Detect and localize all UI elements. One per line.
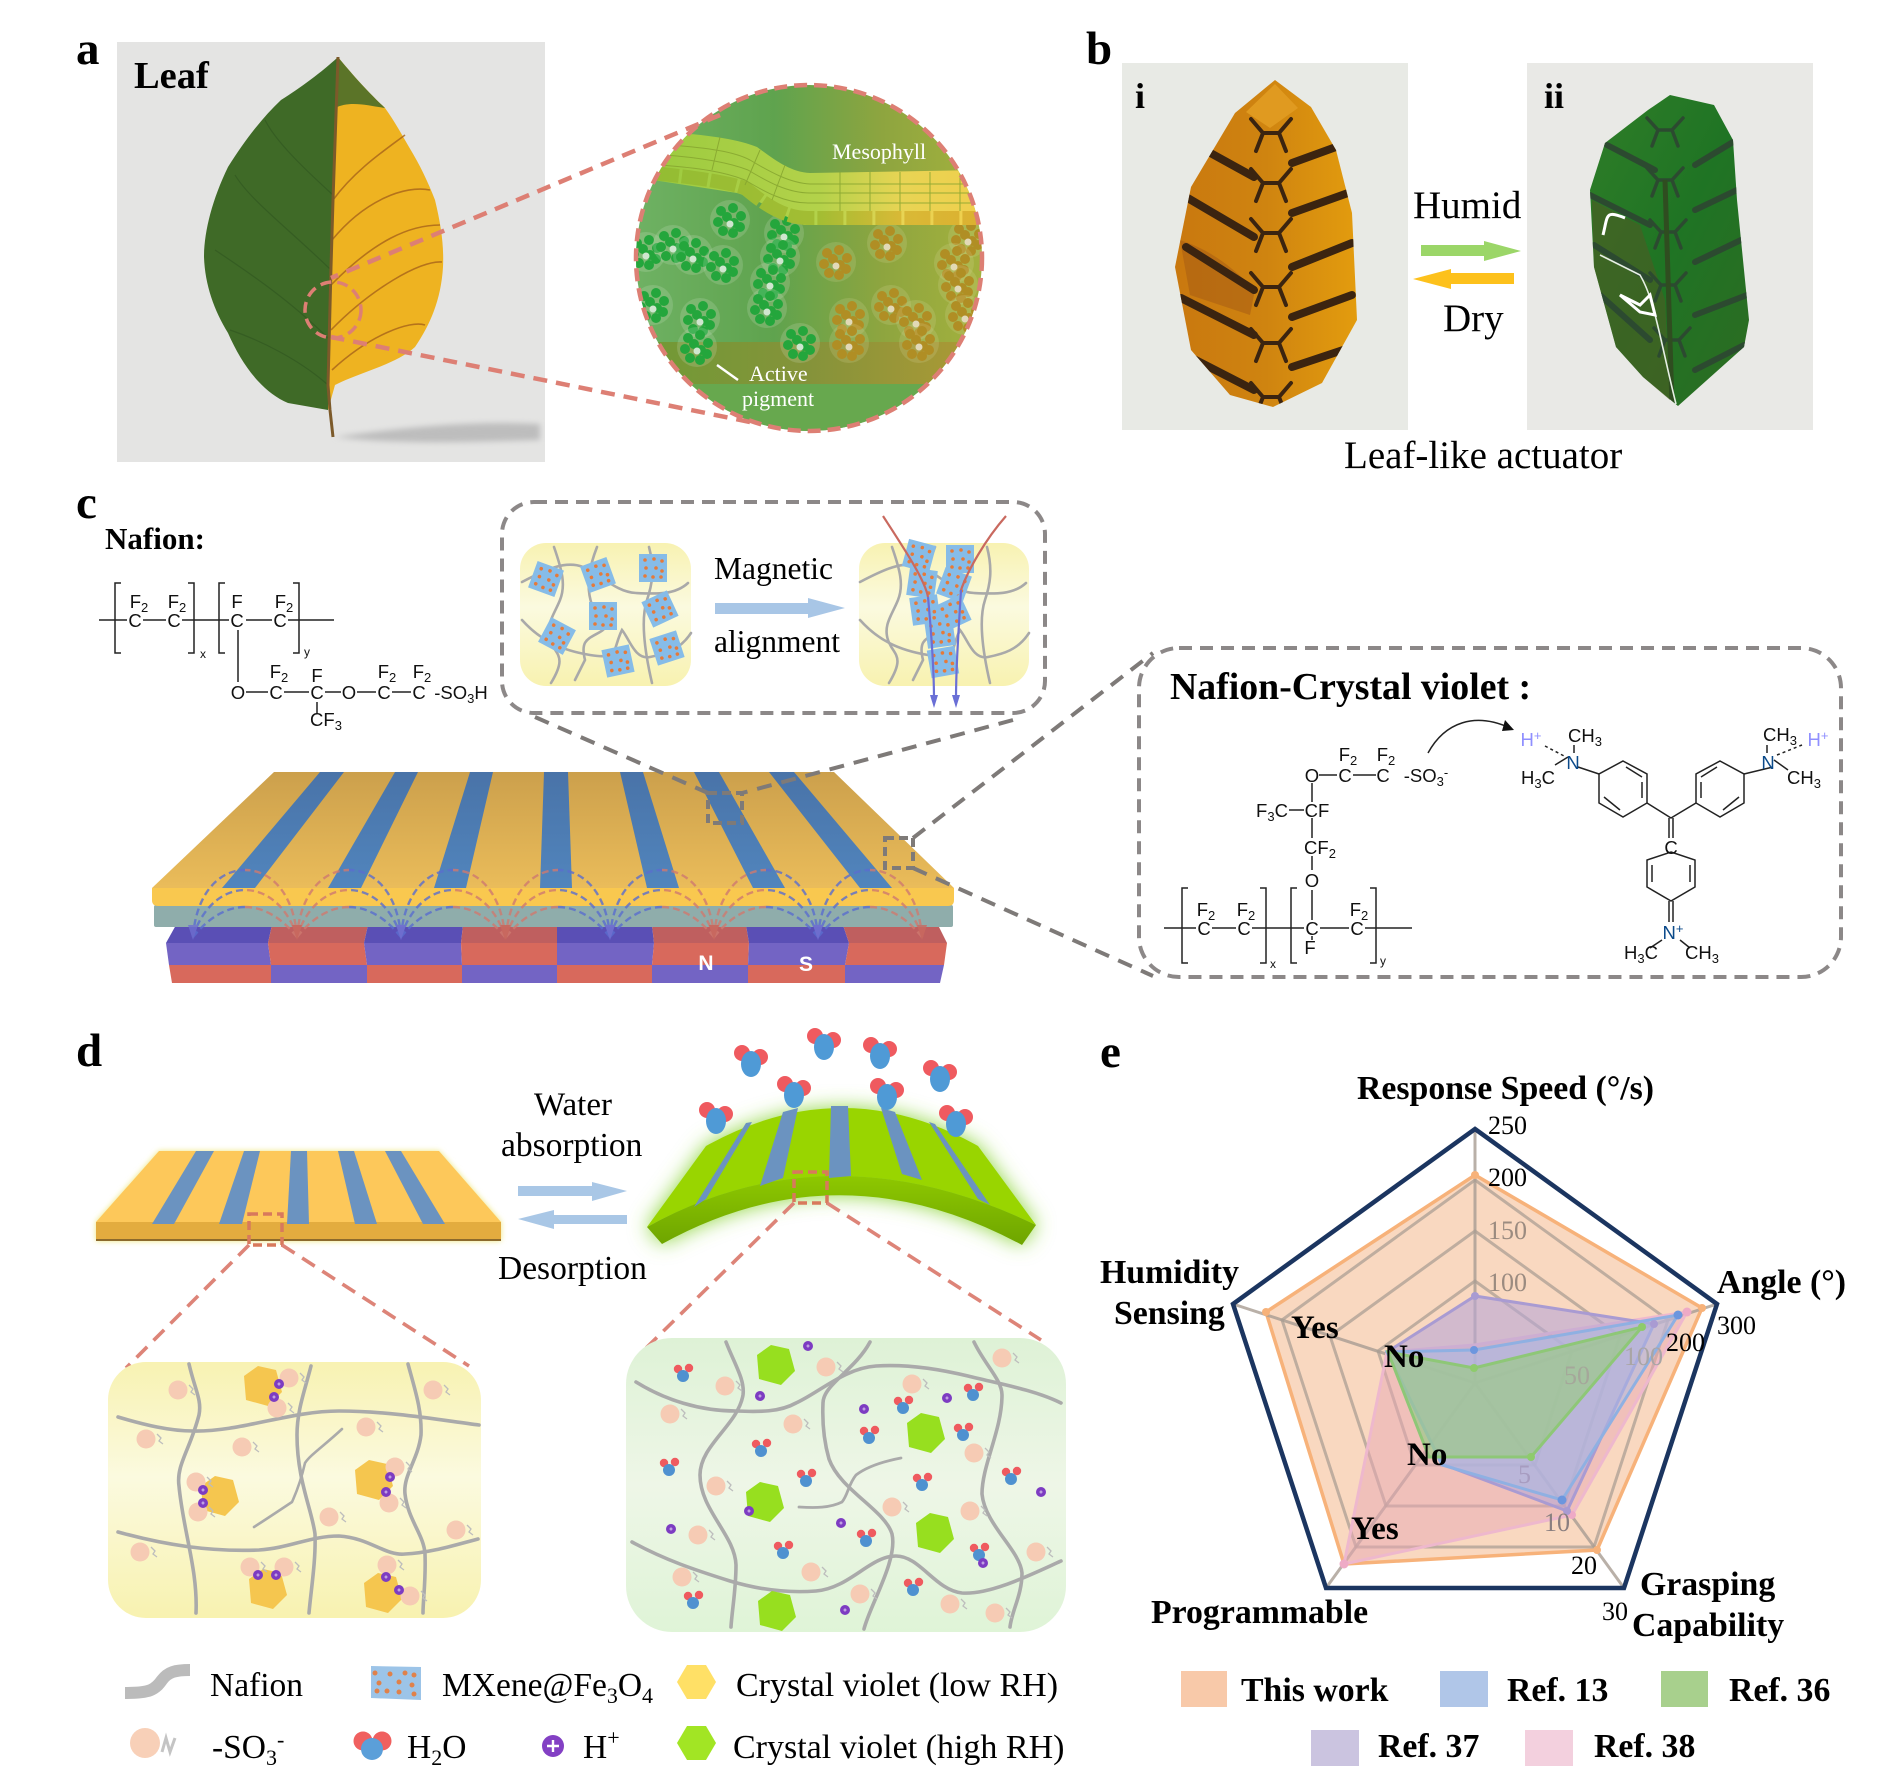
- chemical structure: crystal violet: N: [1761, 752, 1775, 773]
- chemical structure: Nafion side chain: F: [1197, 899, 1208, 920]
- legend: sulfonate group: -SO: [212, 1729, 266, 1766]
- legend: sulfonate group: [130, 1727, 284, 1770]
- arrow: humid (green): [1421, 241, 1521, 261]
- magnetic field lines: [883, 516, 1006, 700]
- label: Mesophyll: Mesophyll: [832, 139, 926, 164]
- arrow: desorption: [518, 1210, 627, 1229]
- series: Ref. 13: [1387, 1315, 1678, 1500]
- panel label a: a: [76, 23, 100, 75]
- axis tick numbers: [1488, 1111, 1756, 1626]
- legend: Ref. 37: [1311, 1728, 1479, 1766]
- chemical structure: crystal violet: H: [1624, 942, 1637, 963]
- axis label: Response Speed: Response Speed (°/s): [1357, 1070, 1654, 1107]
- chemical structure: Nafion: F: [270, 661, 281, 682]
- legend: This work: This work: [1241, 1672, 1389, 1709]
- chemical structure: crystal violet: CH: [1763, 724, 1790, 745]
- chemical structure: Nafion: 2: [424, 670, 431, 685]
- chemical structure: Nafion side chain: CF: [1305, 800, 1329, 821]
- panel label b: b: [1086, 23, 1112, 75]
- chemical structure: Nafion: C: [412, 682, 426, 703]
- label: S pole: S: [799, 953, 813, 976]
- chemical structure: Nafion: F: [311, 665, 323, 686]
- chemical structure: crystal violet: CH: [1568, 725, 1595, 746]
- chemical structure: Nafion: O: [342, 682, 356, 703]
- axis values Yes and No: Yes: [1291, 1310, 1339, 1346]
- chemical structure: Nafion: C: [273, 610, 287, 631]
- chemical structure: Nafion: x: [200, 647, 206, 661]
- axis values Yes and No: No: [1407, 1437, 1447, 1473]
- chemical structure: Nafion: F: [378, 661, 389, 682]
- chemical structure: Nafion: y: [304, 645, 310, 659]
- legend: H2O: 2: [431, 1745, 442, 1770]
- panel c: Nafion structure and magnetic alignment: [76, 477, 1841, 983]
- panel e: radar comparison chart: [1100, 1026, 1846, 1766]
- series: Ref. 37: [1387, 1296, 1654, 1511]
- chemical structure: crystal violet: +: [1821, 728, 1828, 743]
- axis tick numbers: 20: [1571, 1551, 1597, 1580]
- photo i: dry orange actuator: [1122, 63, 1408, 430]
- chemical structure: crystal violet: 3: [1790, 733, 1797, 748]
- label: Desorption: Desorption: [498, 1250, 647, 1287]
- magnified circle view: [626, 80, 990, 440]
- chemical structure: crystal violet: +: [1534, 728, 1541, 743]
- axis tick numbers: 10: [1544, 1508, 1570, 1537]
- inset: aligned MXene sheets: [859, 539, 1029, 686]
- legend: Nafion: [125, 1667, 303, 1704]
- caption: Leaf-like actuator: Leaf-like actuator: [1344, 434, 1622, 477]
- chemical structure: Nafion: F: [130, 591, 141, 612]
- small dashed focus ellipse: [305, 282, 361, 338]
- legend for panel d: [125, 1665, 1064, 1770]
- magnetic field arcs: [188, 870, 927, 940]
- chemical structure: Nafion: C: [310, 682, 324, 703]
- legend: Ref. 36: Ref. 36: [1729, 1672, 1830, 1709]
- magnet array: [166, 925, 947, 983]
- chemical structure: Nafion side chain: -SO: [1404, 765, 1437, 786]
- chemical structure: Nafion: F: [231, 591, 243, 612]
- label i: i: [1135, 76, 1145, 116]
- chemical structure: Nafion side chain: C: [1275, 800, 1288, 821]
- chemical structure: crystal violet: +: [1676, 921, 1683, 936]
- chemical structure: Nafion side chain: 2: [1361, 908, 1368, 923]
- legend: MXene@Fe3O4: O: [618, 1667, 642, 1704]
- legend: Ref. 38: [1525, 1728, 1695, 1766]
- chemical structure: Nafion: F: [168, 591, 179, 612]
- legend: MXene@Fe3O4: [371, 1666, 653, 1708]
- circle dashed outline: [636, 85, 982, 431]
- legend: H2O: [354, 1729, 466, 1770]
- chemical structure: crystal violet: H: [1521, 767, 1534, 788]
- axis tick numbers: 100: [1624, 1342, 1663, 1371]
- label: Leaf: Leaf: [134, 55, 210, 97]
- chemical structure: crystal violet: N: [1566, 752, 1580, 773]
- panel a: leaf photo and magnified mesophyll: [76, 23, 990, 462]
- chemical structure: crystal violet: C: [1542, 767, 1555, 788]
- axis values Yes and No: Yes: [1351, 1511, 1399, 1547]
- chemical structure: Nafion side chain: 3: [1437, 774, 1444, 789]
- chemical structure: Nafion: C: [167, 610, 181, 631]
- label: Magnetic: Magnetic: [714, 551, 833, 586]
- legend: Crystal violet low RH: Crystal violet (low RH): [736, 1667, 1058, 1704]
- leaf shadow: [335, 423, 540, 442]
- leaf photograph drawing: [204, 57, 443, 437]
- axis label: Grasping Capability: Grasping: [1640, 1566, 1775, 1603]
- axis label: Programmable: Programmable: [1151, 1594, 1368, 1631]
- chemical structure: Nafion side chain: F: [1339, 744, 1350, 765]
- label: Dry: Dry: [1443, 297, 1504, 340]
- chemical structure: Nafion side chain: 2: [1388, 753, 1395, 768]
- chemical structure: Nafion side chain: 2: [1248, 908, 1255, 923]
- chemical structure: crystal violet: C: [1645, 942, 1658, 963]
- chemical structure: crystal violet: 3: [1712, 951, 1719, 966]
- axis label: Sensing: Sensing: [1114, 1295, 1225, 1332]
- legend: Nafion: Nafion: [210, 1667, 303, 1704]
- axis tick numbers: 30: [1602, 1597, 1628, 1626]
- chemical structure: Nafion: C: [230, 610, 244, 631]
- chemical structure: Nafion side chain: CF: [1304, 837, 1329, 858]
- water molecules above film: [699, 1028, 973, 1137]
- chemical structure: crystal violet: 3: [1637, 951, 1645, 966]
- chemical structure: Nafion: C: [269, 682, 283, 703]
- outer pentagon: [1233, 1129, 1717, 1588]
- legend: H+: H: [583, 1729, 607, 1766]
- legend: sulfonate group: -: [277, 1727, 284, 1752]
- inset: random MXene sheets: [520, 543, 691, 686]
- legend: sulfonate group: 3: [266, 1745, 277, 1770]
- series: This work: [1266, 1175, 1702, 1564]
- chemical structure: crystal violet: H: [1808, 729, 1821, 750]
- chemical structure: Nafion side chain: F: [1304, 937, 1316, 958]
- zoom connector lines: [535, 653, 1153, 976]
- chemical structure: Nafion: -SO: [434, 682, 467, 703]
- photo background: [117, 42, 545, 462]
- panel d: water absorption and desorption: [76, 1025, 1066, 1770]
- radar chart: [1233, 1111, 1756, 1626]
- axis tick numbers: 150: [1488, 1216, 1527, 1245]
- callout: magnetic alignment box: [502, 502, 1045, 713]
- mesophyll cell layer: [653, 133, 985, 225]
- axis tick numbers: 250: [1488, 1111, 1527, 1140]
- device: low RH yellow film: [96, 1151, 501, 1245]
- series: Ref. 36: [1388, 1327, 1642, 1457]
- chemical structure: Nafion: O: [231, 682, 245, 703]
- chemical structure: Nafion side chain: O: [1305, 765, 1319, 786]
- arrow: absorption: [518, 1182, 627, 1201]
- zoom connector lines: [331, 115, 750, 422]
- axis tick numbers: 300: [1717, 1311, 1756, 1340]
- chemical structure: Nafion side chain: x: [1270, 957, 1276, 971]
- dashed focus squares: [708, 793, 913, 868]
- chemical structure: Nafion side chain: 2: [1208, 908, 1215, 923]
- chemical structure: crystal violet: 3: [1814, 776, 1821, 791]
- actuator film: [152, 772, 954, 888]
- chemical structure: Nafion side chain: F: [1237, 899, 1248, 920]
- legend: MXene@Fe3O4: 3: [607, 1683, 618, 1708]
- radar grid and spokes: [1233, 1129, 1717, 1588]
- chemical structure: crystal violet: CH: [1685, 942, 1712, 963]
- chemical structure: Nafion side chain: F: [1350, 899, 1361, 920]
- legend: MXene@Fe3O4: 4: [642, 1683, 653, 1708]
- axis values Yes and No: No: [1384, 1339, 1424, 1375]
- chemical structure: Nafion: F: [413, 661, 424, 682]
- axis tick numbers: 200: [1666, 1328, 1705, 1357]
- chemical structure: Nafion side chain: 3: [1267, 809, 1275, 824]
- legend: Crystal violet high RH: Crystal violet (high RH): [733, 1729, 1064, 1766]
- arrow: alignment: [715, 598, 845, 618]
- axis label: Capability: Capability: [1632, 1607, 1784, 1644]
- chemical structure: crystal violet: 3: [1534, 776, 1542, 791]
- chemical structure: Nafion: CF: [310, 709, 335, 730]
- chemical structure: Nafion side chain: C: [1197, 918, 1211, 939]
- photo ii: humid green actuator: [1527, 63, 1813, 430]
- chemical structure: Nafion: [99, 583, 488, 733]
- chemical structure: Nafion side chain: -: [1444, 765, 1448, 780]
- label: alignment: alignment: [714, 624, 840, 659]
- panel label d: d: [76, 1025, 102, 1077]
- chemical structure: Nafion side chain: [1164, 720, 1514, 971]
- inset: high RH network: [626, 1338, 1066, 1632]
- legend: This work: [1181, 1671, 1389, 1709]
- axis values Yes and No: [1291, 1310, 1447, 1547]
- legend: H+: +: [607, 1725, 620, 1750]
- device: magnets, substrate and actuator film: [152, 653, 1153, 983]
- chemical structure: Nafion side chain: 2: [1350, 753, 1357, 768]
- chemical structure: Nafion side chain: C: [1237, 918, 1251, 939]
- legend: Ref. 38: Ref. 38: [1594, 1728, 1695, 1765]
- chemical structure: Nafion side chain: O: [1305, 870, 1319, 891]
- chemical structure: Nafion: 2: [179, 600, 186, 615]
- legend: H2O: H: [407, 1729, 431, 1766]
- chemical structure: Nafion: 3: [335, 718, 342, 733]
- legend: MXene@Fe3O4: MXene@Fe: [442, 1667, 607, 1704]
- label: pigment: pigment: [742, 386, 814, 411]
- chemical structure: Nafion: 2: [286, 600, 293, 615]
- axis label: Angle: Angle (°): [1717, 1264, 1846, 1301]
- chemical structure: Nafion side chain: F: [1256, 800, 1267, 821]
- legend: H+: [542, 1725, 620, 1766]
- chemical structure: Nafion side chain: y: [1380, 954, 1386, 968]
- chemical structure: Nafion side chain: 2: [1329, 846, 1336, 861]
- chemical structure: Nafion side chain: C: [1305, 918, 1319, 939]
- device: high RH green bent film: [647, 1106, 1036, 1245]
- label: Active pigment: Active: [749, 361, 808, 386]
- label: absorption: absorption: [501, 1127, 643, 1164]
- data points: [1262, 1171, 1706, 1568]
- axis tick numbers: 200: [1488, 1163, 1527, 1192]
- chemical structure: Nafion: H: [474, 682, 488, 703]
- chemical structure: Nafion side chain: F: [1377, 744, 1388, 765]
- inset: low RH network: [108, 1362, 481, 1618]
- zoom connector lines: [126, 1203, 1041, 1368]
- chemical structure: Nafion: 2: [141, 600, 148, 615]
- legend: Ref. 13: [1440, 1671, 1608, 1709]
- axis label: Humidity Sensing: Humidity: [1100, 1254, 1239, 1291]
- chemical structure: Nafion side chain: C: [1376, 765, 1390, 786]
- series: Ref. 38: [1344, 1312, 1687, 1564]
- substrate layer: [154, 905, 953, 927]
- legend: Ref. 13: Ref. 13: [1507, 1672, 1608, 1709]
- chemical structure: Nafion: 2: [281, 670, 288, 685]
- legend: H2O: O: [442, 1729, 466, 1766]
- chemical structure: crystal violet: C: [1664, 837, 1678, 858]
- chemical structure: Nafion side chain: C: [1350, 918, 1364, 939]
- arrow to active pigment: [717, 365, 738, 380]
- chemical structure: Nafion side chain: C: [1338, 765, 1352, 786]
- chemical structure: Nafion: C: [377, 682, 391, 703]
- blue stripes: [222, 772, 892, 888]
- chemical structure: Nafion: F: [275, 591, 286, 612]
- panel b: leaf-like actuator photos: [1086, 23, 1813, 477]
- arrow: dry (yellow): [1413, 269, 1514, 289]
- label: Water absorption: Water: [534, 1087, 612, 1123]
- axis tick numbers: 5: [1518, 1460, 1531, 1489]
- chemical structure: Nafion: C: [128, 610, 142, 631]
- chemical structure: Nafion: 3: [467, 691, 474, 706]
- legend: Ref. 36: [1661, 1671, 1830, 1709]
- label: Humid: Humid: [1413, 184, 1522, 227]
- chemical structure: crystal violet: H: [1521, 729, 1534, 750]
- heading: Nafion: Nafion:: [105, 521, 205, 556]
- heading: Nafion-Crystal violet: Nafion-Crystal violet :: [1170, 666, 1531, 708]
- chemical structure: crystal violet: N: [1663, 922, 1676, 943]
- chemical structure: crystal violet: [1521, 724, 1828, 966]
- panel label e: e: [1100, 1026, 1121, 1078]
- label: N pole: N: [698, 952, 714, 975]
- panel label c: c: [76, 477, 97, 529]
- label ii: ii: [1544, 76, 1564, 116]
- legend: Ref. 37: Ref. 37: [1378, 1728, 1479, 1765]
- radar legend: [1181, 1671, 1830, 1766]
- axis tick numbers: 100: [1488, 1268, 1527, 1297]
- chemical structure: crystal violet: 3: [1595, 734, 1602, 749]
- callout: Nafion-Crystal violet structure: [1139, 648, 1841, 977]
- chemical structure: crystal violet: CH: [1787, 767, 1814, 788]
- axis tick numbers: 50: [1564, 1361, 1590, 1390]
- chemical structure: Nafion: 2: [389, 670, 396, 685]
